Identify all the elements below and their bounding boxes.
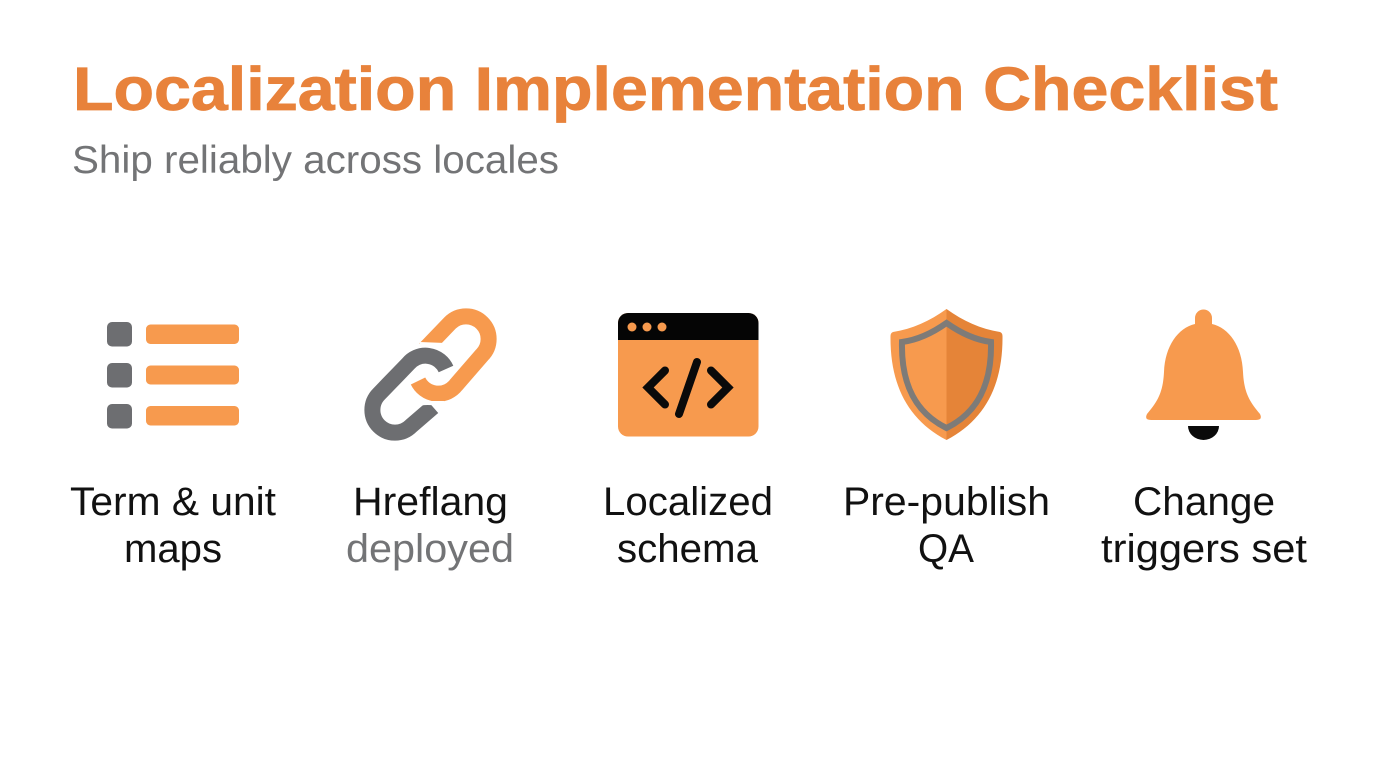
label: term and unit maps: maps xyxy=(124,527,222,571)
label: pre-publish QA xyxy=(843,480,1050,571)
item: hreflang deployed xyxy=(346,316,514,571)
label: change triggers set xyxy=(1101,480,1307,571)
icon: code window xyxy=(618,313,758,436)
label: localized schema xyxy=(603,480,773,571)
label: change triggers set: triggers set xyxy=(1101,527,1307,571)
subtitle: Ship reliably across locales xyxy=(72,139,559,182)
icon: shield xyxy=(890,309,1003,440)
item: localized schema xyxy=(603,313,773,571)
item: term and unit maps xyxy=(70,322,276,571)
label: pre-publish QA: QA xyxy=(918,527,974,571)
label: hreflang deployed xyxy=(346,480,514,571)
label: term and unit maps: Term & unit xyxy=(70,480,276,524)
icon: chain link xyxy=(372,316,489,433)
label: term and unit maps xyxy=(70,480,276,571)
label: pre-publish QA: Pre-publish xyxy=(843,480,1050,524)
label: change triggers set: Change xyxy=(1133,480,1275,524)
icon: list xyxy=(107,322,239,428)
label: localized schema: Localized xyxy=(603,480,773,524)
icon: bell xyxy=(1146,310,1261,440)
label: hreflang deployed: Hreflang xyxy=(353,480,508,524)
item: change triggers set xyxy=(1101,310,1307,571)
title: Localization Implementation Checklist xyxy=(73,55,1278,123)
label: localized schema: schema xyxy=(617,527,759,571)
item: pre-publish QA xyxy=(843,309,1050,571)
label: hreflang deployed: deployed xyxy=(346,527,514,571)
